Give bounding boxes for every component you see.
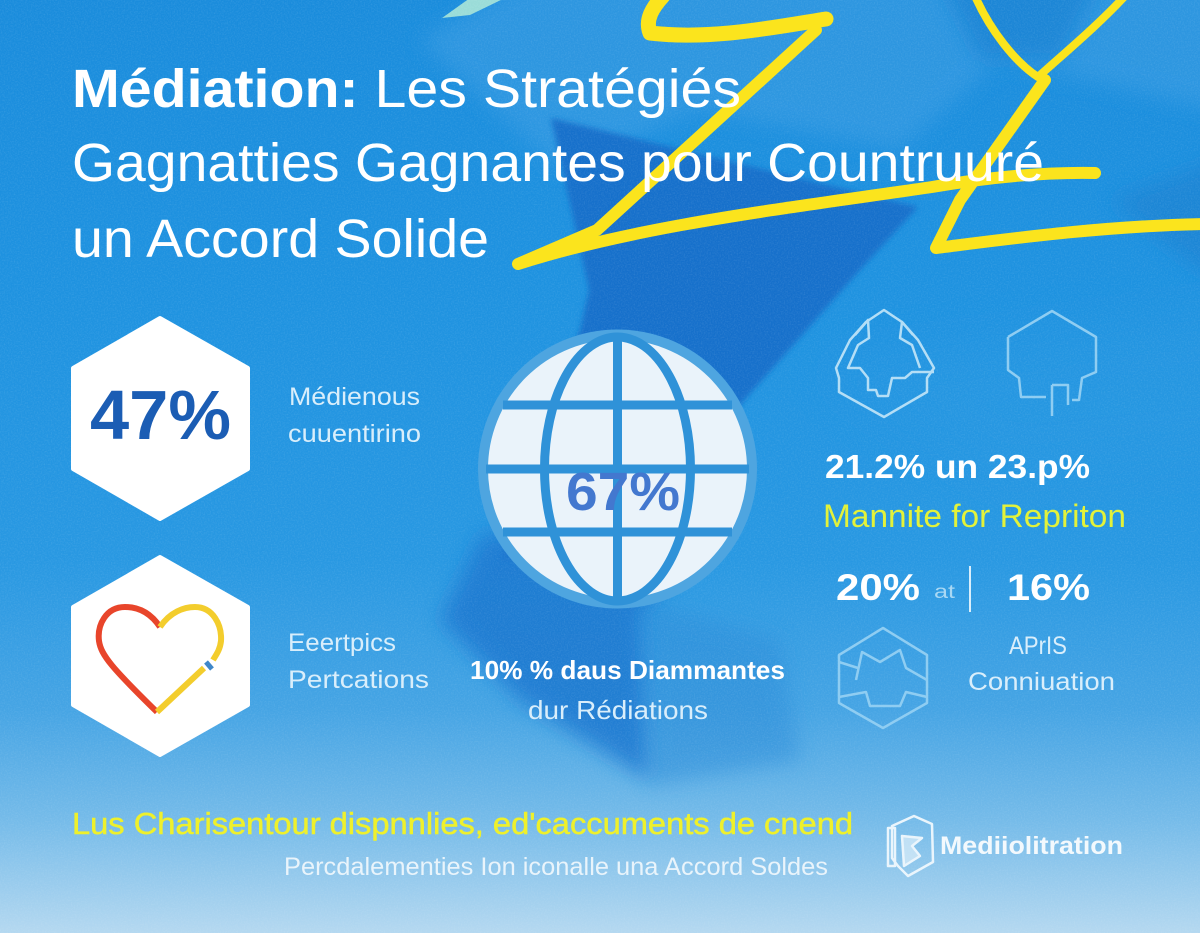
stats: 20% and 16% bbox=[836, 566, 1090, 612]
title: un Accord Solide bbox=[72, 209, 489, 269]
yellow scribble bbox=[518, 0, 1200, 264]
label: Médienous cuuentirino bbox=[288, 383, 421, 448]
stat: 67%: 67% bbox=[566, 462, 680, 522]
stats: 20% and 16%: 20% bbox=[836, 567, 920, 608]
label: Médienous cuuentirino: Médienous bbox=[289, 383, 420, 411]
subheading: Mannite for Repriton: Mannite for Repriton bbox=[823, 498, 1126, 534]
label: Médienous cuuentirino: cuuentirino bbox=[288, 420, 421, 448]
title: Gagnatties Gagnantes pour Countruuré bbox=[72, 133, 1044, 193]
icon: outline hexagon house two bbox=[1008, 311, 1096, 416]
title bbox=[72, 59, 1044, 269]
panel: heart hexagon bbox=[73, 557, 248, 755]
logo: Mediiolitration bbox=[888, 816, 1123, 876]
caption: Diammantes bbox=[470, 655, 785, 725]
label: Eeertpics Pertcations: Pertcations bbox=[288, 666, 429, 694]
label: APrls Conniuation: APrIS bbox=[1009, 632, 1067, 660]
label: Eeertpics Pertcations bbox=[288, 629, 429, 694]
title: Médiation: Les Stratégiés bbox=[72, 59, 741, 119]
label: Eeertpics Pertcations: Eeertpics bbox=[288, 629, 396, 657]
stats: 20% and 16%: at bbox=[934, 582, 956, 603]
label: APrls Conniuation bbox=[968, 632, 1115, 696]
globe icon with 67% bbox=[482, 334, 752, 604]
logo: Mediiolitration: Mediiolitration bbox=[940, 832, 1123, 860]
label: APrls Conniuation: Conniuation bbox=[968, 668, 1115, 696]
icon: outline hexagon house one bbox=[836, 310, 934, 417]
stat: 47%: 47% bbox=[90, 376, 231, 454]
caption: Diammantes: 10% % daus Diammantes bbox=[470, 655, 785, 685]
icon: heart bbox=[99, 607, 221, 712]
icon: outline hexagon three bbox=[839, 628, 927, 728]
stats: 20% and 16%: 16% bbox=[1007, 567, 1090, 608]
caption: Diammantes: dur Rédiations bbox=[528, 695, 708, 725]
icon: logo emblem bbox=[888, 816, 933, 876]
footer headline: Lus Charisentour dispnnlies, ed'caccuments de cnend bbox=[72, 806, 853, 841]
stat: 21.2% un 23.p%: 21.2% un 23.p% bbox=[825, 448, 1090, 485]
footer subline: Percdalementies Ion iconalle una Accord Soldes bbox=[284, 853, 828, 881]
panel: 47% hexagon bbox=[73, 318, 248, 519]
